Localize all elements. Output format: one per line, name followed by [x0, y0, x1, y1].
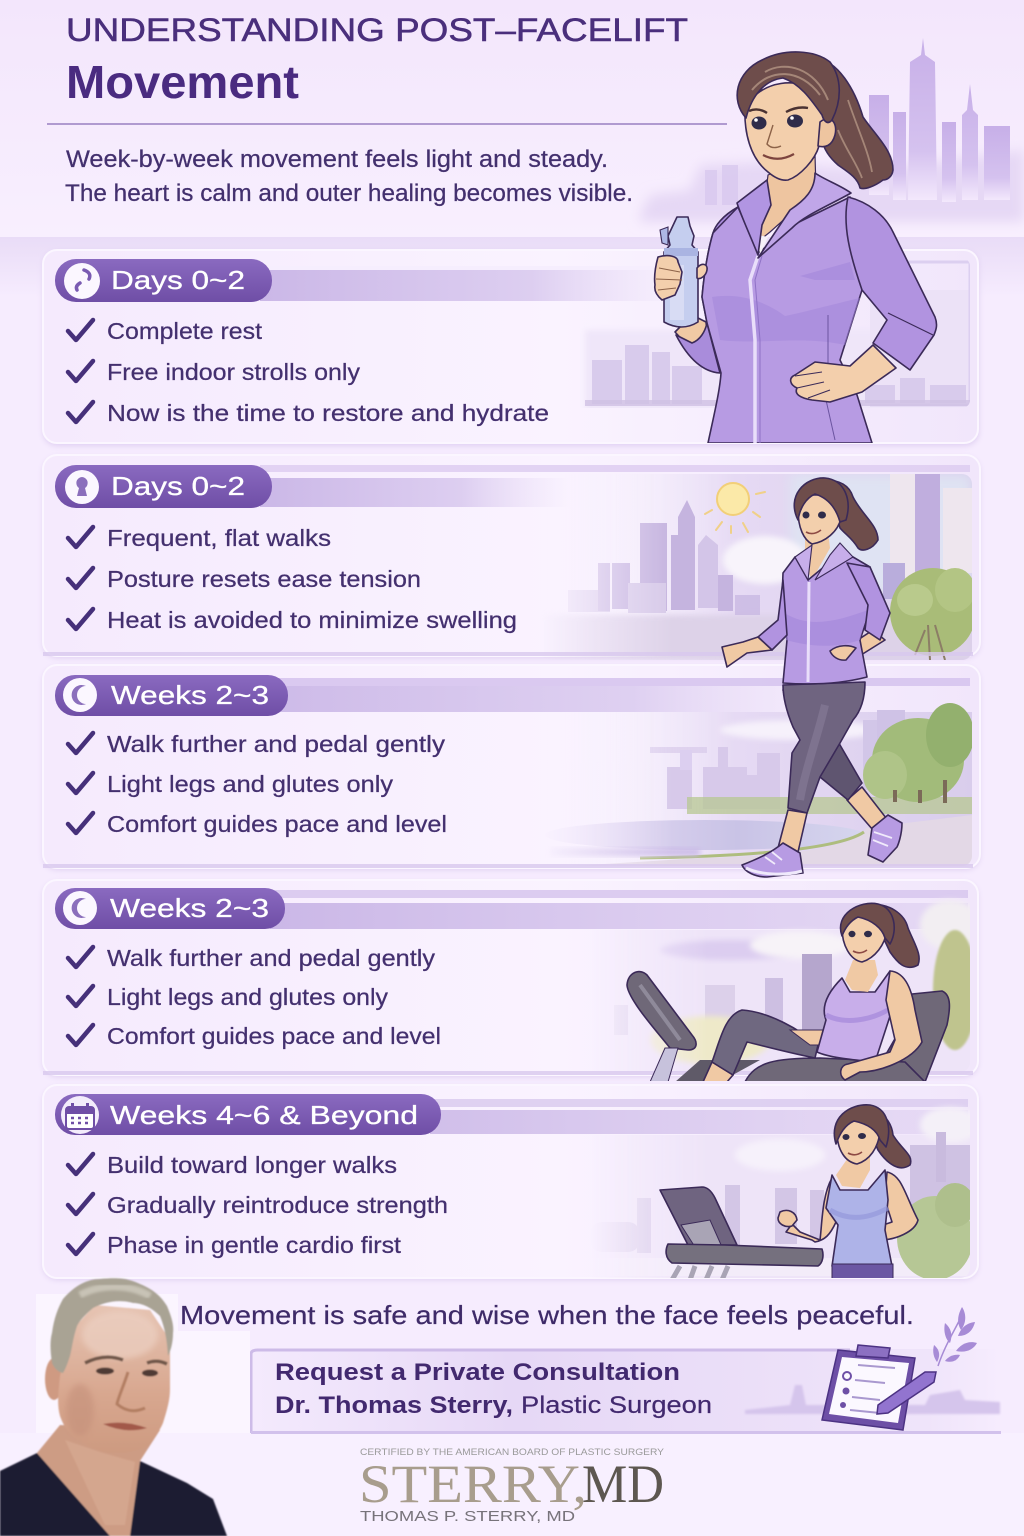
list [68, 947, 93, 967]
scene: city with sun [540, 474, 976, 660]
call to action: Request a Private Consultation [275, 1359, 680, 1386]
neck [37, 1425, 160, 1536]
list [68, 320, 93, 340]
intro text: The heart is calm and outer healing becomes visible. [65, 180, 633, 207]
forearm right [830, 630, 885, 660]
panel: weeks 4-6 and beyond: Build toward longer walks [107, 1152, 397, 1178]
panel: weeks 2-3 cycling: Weeks 2~3 [110, 893, 269, 923]
face [745, 83, 828, 180]
panel: weeks 2-3 cycling [43, 880, 980, 1077]
panel: days 0-2 rest: Days 0~2 [111, 265, 245, 295]
tank top [826, 1170, 892, 1268]
panel: weeks 4-6 and beyond: Weeks 4~6 & Beyond [110, 1100, 418, 1130]
jacket [782, 552, 870, 684]
panel: weeks 2-3 cycling: Comfort guides pace and level [107, 1023, 441, 1049]
panel: weeks 2-3 walks: Comfort guides pace and level [107, 811, 447, 837]
panel: days 0-2 rest: Complete rest [107, 318, 263, 344]
panel: days 0-2 walks: Days 0~2 [111, 471, 245, 501]
certification logo: STERRY, [359, 1454, 587, 1514]
tank top [817, 971, 892, 1062]
call to action: Plastic Surgeon [521, 1392, 712, 1419]
scene: clouds and towers [614, 903, 970, 1071]
header strip [260, 270, 680, 301]
ponytail [825, 480, 878, 550]
panel: weeks 4-6 and beyond: Gradually reintroduce strength [107, 1192, 448, 1218]
badge [55, 1094, 441, 1135]
illustration: woman with treadmill [660, 1105, 918, 1280]
panel: days 0-2 rest: Free indoor strolls only [107, 359, 361, 385]
certification logo: CERTIFIED BY THE AMERICAN BOARD OF PLASTIC SURGERY [360, 1447, 665, 1458]
scene: lake park [540, 703, 974, 868]
small skyline [745, 1385, 1000, 1414]
closing statement: Movement is safe and wise when the face feels peaceful. [180, 1300, 914, 1330]
illustration: woman with water bottle [655, 52, 937, 443]
neck and head [836, 1155, 870, 1188]
hand on hip [830, 646, 856, 660]
panel: weeks 2-3 walks [43, 665, 980, 870]
ear [45, 1358, 63, 1400]
panel: days 0-2 walks: Heat is avoided to minimize swelling [107, 607, 517, 633]
sleeve left [758, 580, 787, 650]
list [68, 1154, 93, 1174]
panel: days 0-2 walks [43, 455, 980, 660]
badge [55, 259, 272, 302]
panel: days 0-2 rest [43, 250, 979, 446]
panel: weeks 4-6 and beyond [43, 1085, 980, 1280]
scene: clouds and trees [590, 1107, 980, 1280]
front lower leg [778, 810, 807, 852]
treadmill base [666, 1244, 823, 1266]
water bottle [664, 217, 698, 327]
panel: days 0-2 walks: Posture resets ease tension [107, 566, 421, 592]
hair tail [876, 1118, 912, 1169]
arm back [841, 971, 922, 1080]
hair [50, 1278, 173, 1373]
icon: leaf sprig [933, 1307, 977, 1366]
shoe back [868, 815, 902, 862]
arms [786, 1178, 836, 1242]
neck [805, 532, 830, 580]
call to action [251, 1349, 1001, 1434]
panel: days 0-2 rest: Now is the time to restore and hydrate [107, 400, 549, 426]
panel: weeks 2-3 cycling: Walk further and pedal gently [107, 945, 436, 971]
illustration: woman on recumbent bike [627, 903, 949, 1082]
face [58, 1305, 170, 1453]
collar [737, 180, 771, 255]
intro text: Week-by-week movement feels light and steady. [66, 146, 608, 173]
forearm and hand on hip [791, 345, 896, 402]
neck and head [845, 960, 878, 992]
jacket sleeve right [846, 197, 937, 370]
panel: weeks 2-3 walks: Light legs and glutes only [107, 771, 394, 797]
badge [55, 888, 285, 929]
title [66, 12, 688, 108]
legs [712, 1010, 818, 1075]
title: Movement [66, 56, 299, 108]
skin below hand [674, 317, 706, 342]
hair front [737, 52, 839, 122]
icon: calendar [66, 1103, 94, 1129]
intro text [65, 146, 633, 207]
illustration: woman walking [722, 478, 902, 877]
bike seat back [886, 990, 950, 1081]
pants [832, 1264, 893, 1280]
tee [760, 236, 768, 254]
head [798, 495, 841, 544]
panel: weeks 2-3 cycling: Light legs and glutes only [107, 984, 389, 1010]
ear [818, 119, 836, 147]
facial features [752, 116, 766, 130]
back shin [675, 1060, 760, 1082]
panel: weeks 4-6 and beyond: Phase in gentle cardio first [107, 1232, 402, 1258]
badge [55, 465, 272, 508]
scrubs [0, 1453, 227, 1536]
back leg capri [783, 690, 862, 800]
panel: weeks 2-3 walks: Walk further and pedal gently [107, 731, 446, 757]
list [68, 733, 93, 753]
neck [760, 155, 816, 240]
bike console [627, 972, 696, 1050]
arm forward [790, 1030, 825, 1045]
skyline: header [640, 38, 1024, 222]
treadmill console [660, 1187, 737, 1245]
back lower leg [847, 787, 890, 830]
jacket sleeve left [676, 207, 738, 373]
call to action: Dr. Thomas Sterry, [275, 1392, 513, 1419]
sun [705, 483, 765, 533]
jacket torso [702, 197, 872, 443]
panel: days 0-2 walks: Frequent, flat walks [107, 525, 331, 551]
title: UNDERSTANDING POST–FACELIFT [66, 12, 688, 48]
certification logo: MD [582, 1454, 664, 1514]
shoe front [742, 843, 803, 877]
certification logo: THOMAS P. STERRY, MD [360, 1508, 575, 1525]
certification logo [359, 1447, 665, 1525]
scene: indoor skyline window [585, 262, 970, 410]
list [68, 527, 93, 547]
sleeve right [847, 563, 890, 640]
front leg capri [783, 682, 865, 813]
features [85, 1357, 167, 1364]
ponytail [824, 64, 894, 190]
hand on bottle [655, 256, 682, 300]
badge [55, 675, 288, 716]
icon: clipboard with pen [822, 1345, 936, 1430]
panel: weeks 2-3 walks: Weeks 2~3 [111, 680, 269, 710]
forearm left and fist [722, 637, 772, 667]
doctor portrait [0, 1278, 250, 1536]
